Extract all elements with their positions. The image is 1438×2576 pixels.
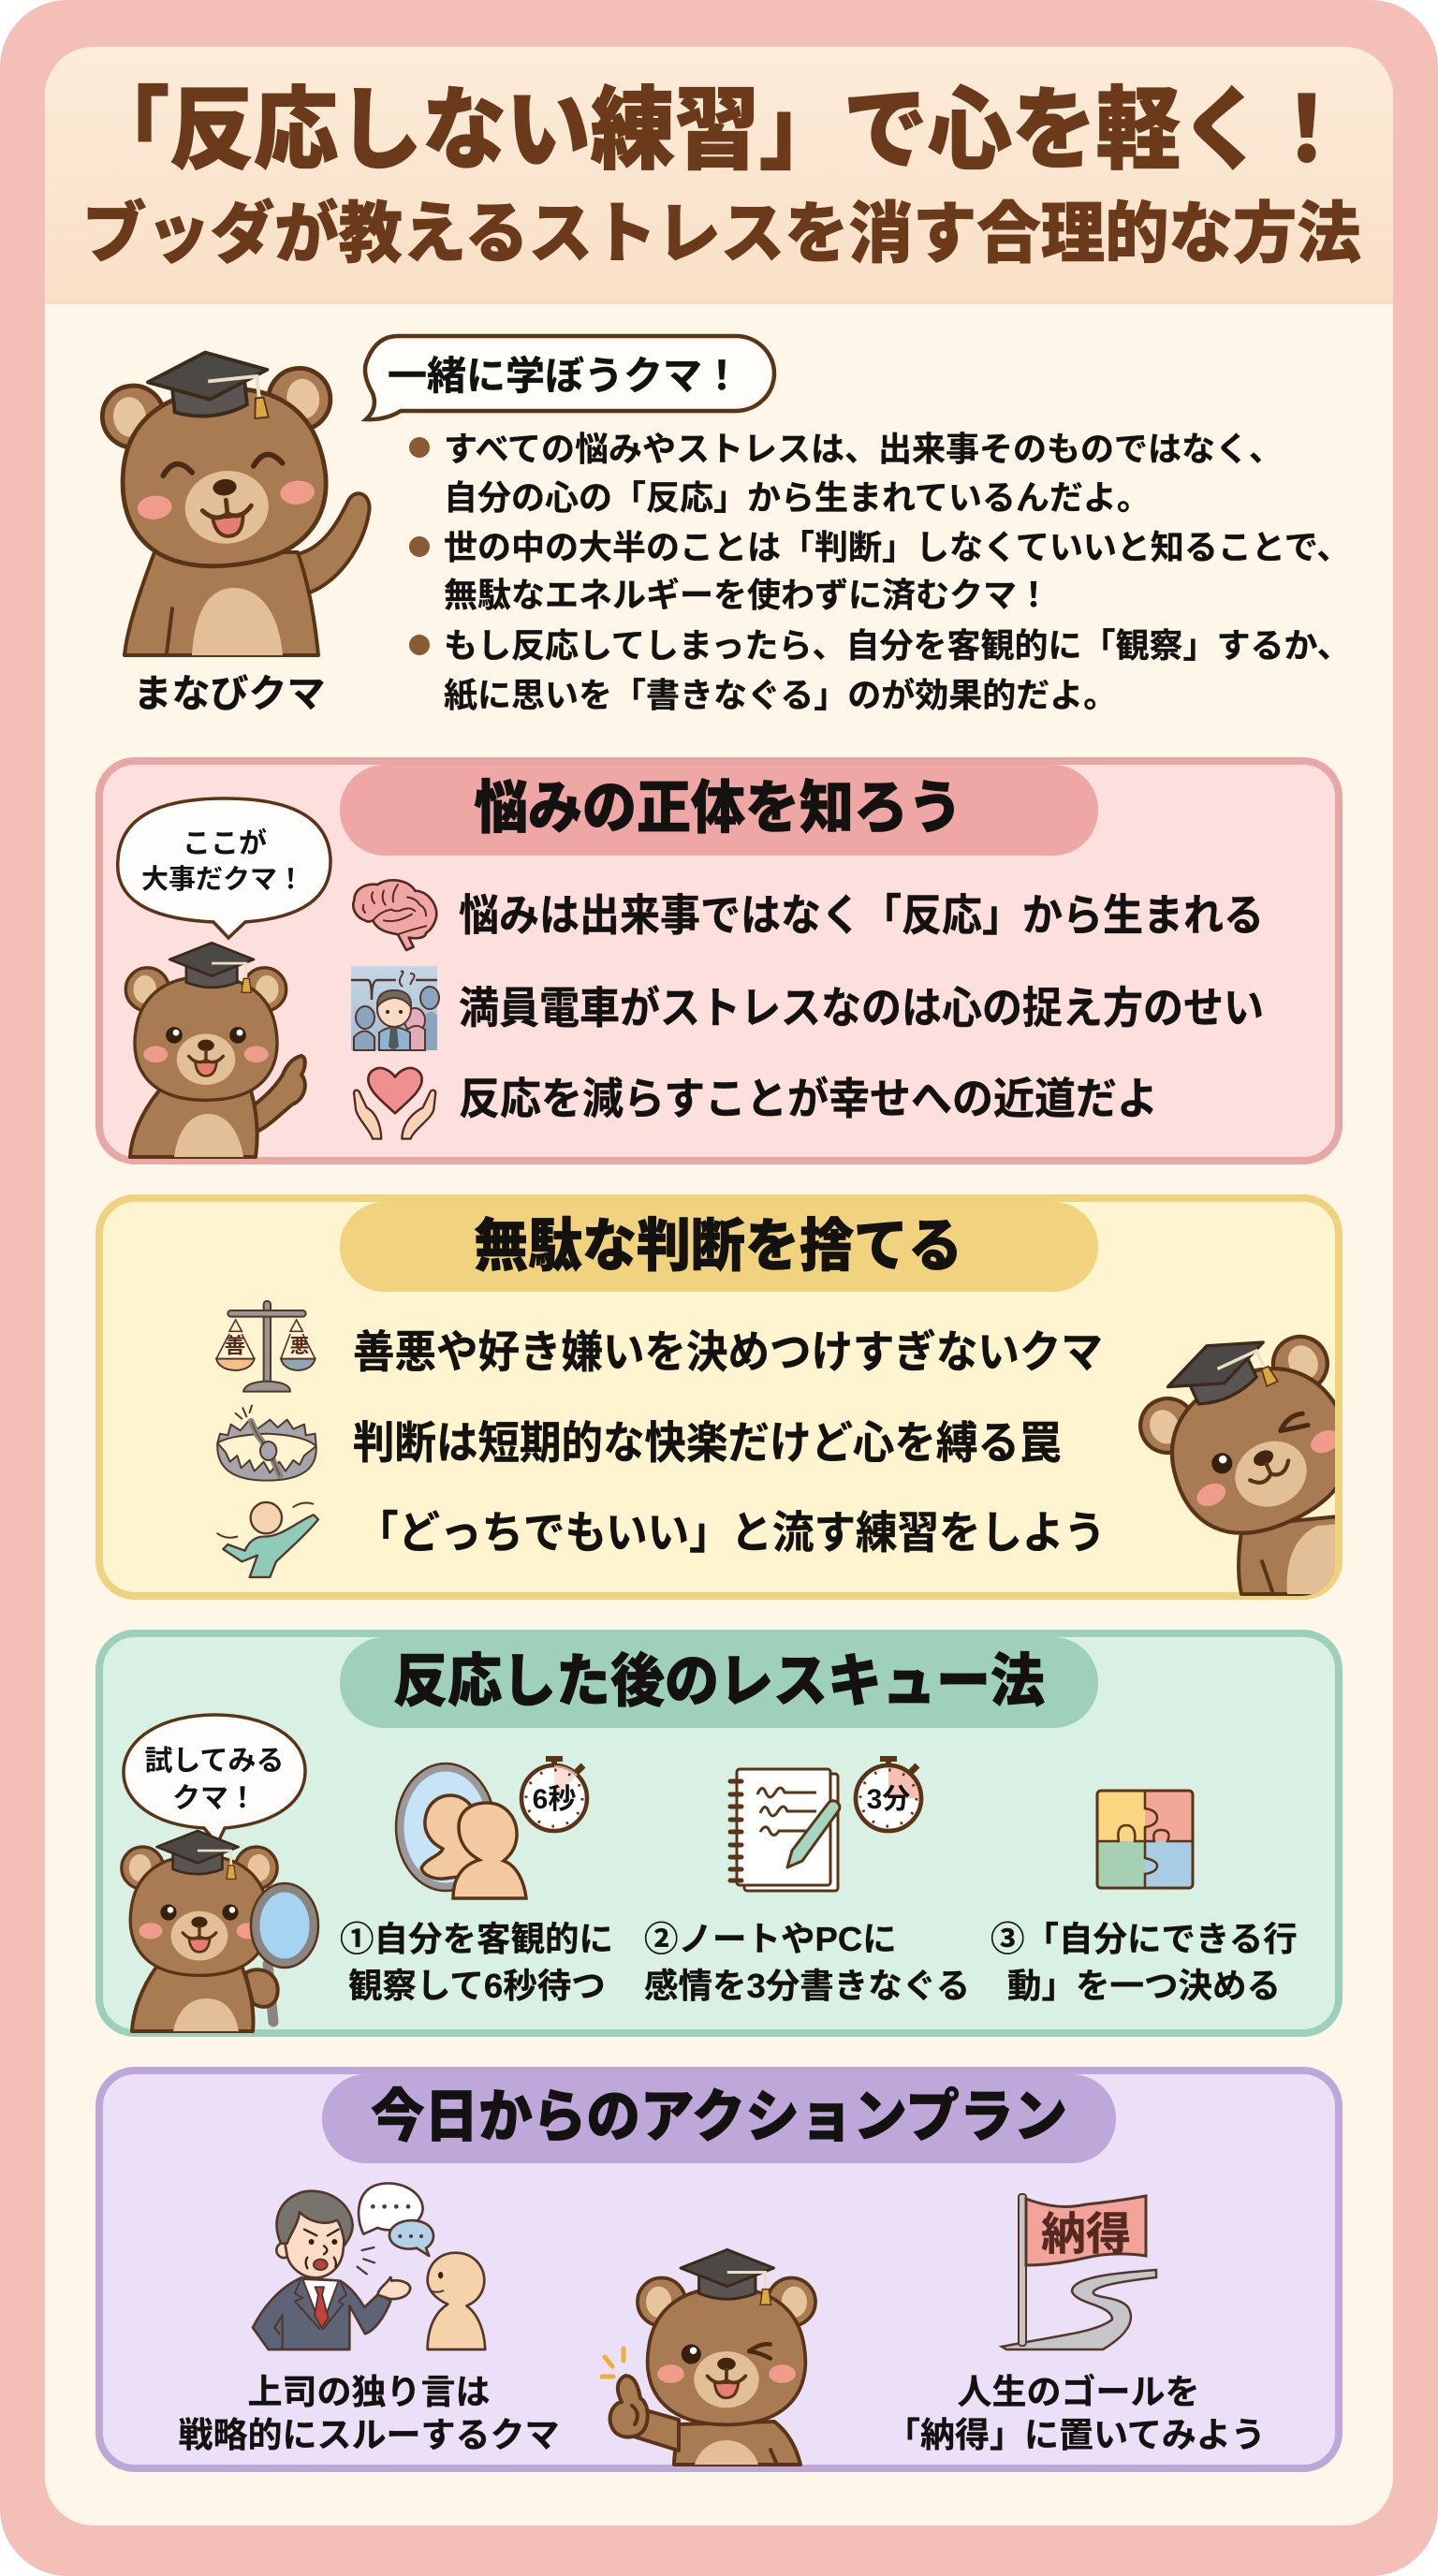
list items: 反応を減らすことが幸せへの近道だよ	[459, 1075, 1158, 1123]
icon: crowded train	[351, 966, 439, 1050]
tab heading: 無駄な判断を捨てる	[474, 1213, 962, 1278]
icon: notebook with timer: 3分	[867, 1784, 910, 1815]
header band	[45, 47, 1393, 304]
icon: notebook with timer	[730, 1759, 921, 1891]
speech bubble	[124, 1715, 305, 1844]
list items: 「どっちでもいい」と流す練習をしよう	[357, 1508, 1106, 1558]
list items	[459, 891, 1264, 1123]
tab heading: 反応した後のレスキュー法	[393, 1648, 1045, 1713]
icon: brain	[353, 880, 436, 950]
icon: mirror with timer	[396, 1759, 587, 1898]
step captions: ②ノートやPCに	[644, 1920, 897, 1958]
icon: boss talking and person	[253, 2183, 485, 2349]
subtitle: ブッダが教えるストレスを消す合理的な方法	[82, 197, 1361, 271]
speech bubble	[118, 798, 330, 938]
list items: 満員電車がストレスなのは心の捉え方のせい	[459, 984, 1264, 1032]
icon: trap	[217, 1406, 316, 1481]
bullet list	[409, 430, 1351, 714]
caption left: 戦略的にスルーするクマ	[178, 2416, 560, 2454]
tab heading	[340, 1637, 1098, 1728]
list items: 善悪や好き嫌いを決めつけすぎないクマ	[353, 1327, 1103, 1377]
tab heading: 悩みの正体を知ろう	[474, 775, 962, 840]
tab heading	[322, 2074, 1116, 2163]
panel: 反応した後のレスキュー法	[99, 1633, 1339, 2033]
speech bubble: ここが	[183, 827, 267, 859]
panel: 無駄な判断を捨てる	[99, 1198, 1384, 1596]
step captions: ③「自分にできる行	[990, 1920, 1298, 1958]
panel: 今日からのアクションプラン	[99, 2071, 1339, 2468]
step captions: 観察して6秒待つ	[348, 1967, 606, 2005]
bullet list: すべての悩みやストレスは、出来事そのものではなく、	[444, 430, 1283, 468]
step captions: 感情を3分書きなぐる	[644, 1967, 970, 2005]
tab heading	[340, 765, 1098, 856]
title: 「反応しない練習」で心を軽く！	[85, 80, 1349, 181]
tab heading	[340, 1202, 1098, 1292]
caption right: 「納得」に置いてみよう	[886, 2416, 1266, 2454]
icon: scales	[216, 1301, 315, 1392]
speech bubble: 試してみる	[144, 1746, 285, 1777]
bear name: まなびクマ	[133, 672, 326, 715]
bullet list: 紙に思いを「書きなぐる」のが効果的だよ。	[444, 676, 1117, 714]
icon: puzzle	[1097, 1791, 1193, 1888]
speech bubble	[365, 336, 774, 419]
bullet list: 世の中の大半のことは「判断」しなくていいと知ることで、	[444, 528, 1350, 566]
tab heading: 今日からのアクションプラン	[371, 2084, 1067, 2148]
caption left	[178, 2373, 560, 2454]
panel: 悩みの正体を知ろう	[99, 761, 1339, 1161]
bullet list: 自分の心の「反応」から生まれているんだよ。	[444, 478, 1151, 517]
icon: scales: 善	[225, 1334, 245, 1358]
step captions: ①自分を客観的に	[340, 1920, 613, 1958]
bullet list: 無駄なエネルギーを使わずに済むクマ！	[444, 576, 1050, 614]
icon: mirror with timer: 6秒	[533, 1784, 576, 1815]
list items: 悩みは出来事ではなく「反応」から生まれる	[459, 891, 1264, 940]
speech bubble: 大事だクマ！	[141, 864, 304, 895]
bear: pointing	[125, 943, 305, 1157]
caption left: 上司の独り言は	[247, 2373, 491, 2411]
speech bubble: クマ！	[172, 1783, 257, 1814]
bear: graduate waving	[96, 340, 370, 655]
icon: heart in hands	[354, 1068, 435, 1139]
icon: letting go person	[217, 1502, 318, 1577]
list items: 判断は短期的な快楽だけど心を縛る罠	[353, 1418, 1061, 1468]
icon: goal flag: 納得	[1041, 2210, 1131, 2260]
icon: goal flag	[1002, 2194, 1156, 2349]
bear: magnifier	[122, 1831, 318, 2031]
bullet list: もし反応してしまったら、自分を客観的に「観察」するか、	[444, 626, 1351, 665]
list items	[353, 1327, 1106, 1558]
bear: winking peek	[1138, 1335, 1335, 1596]
step captions	[340, 1920, 1298, 2005]
panel: intro	[96, 336, 1351, 715]
bear: thumbs up	[602, 2249, 815, 2465]
speech bubble: 一緒に学ぼうクマ！	[388, 354, 741, 398]
icon: scales: 悪	[290, 1336, 309, 1357]
caption right	[886, 2372, 1266, 2454]
caption right: 人生のゴールを	[957, 2372, 1200, 2411]
step captions: 動」を一つ決める	[1007, 1967, 1281, 2005]
